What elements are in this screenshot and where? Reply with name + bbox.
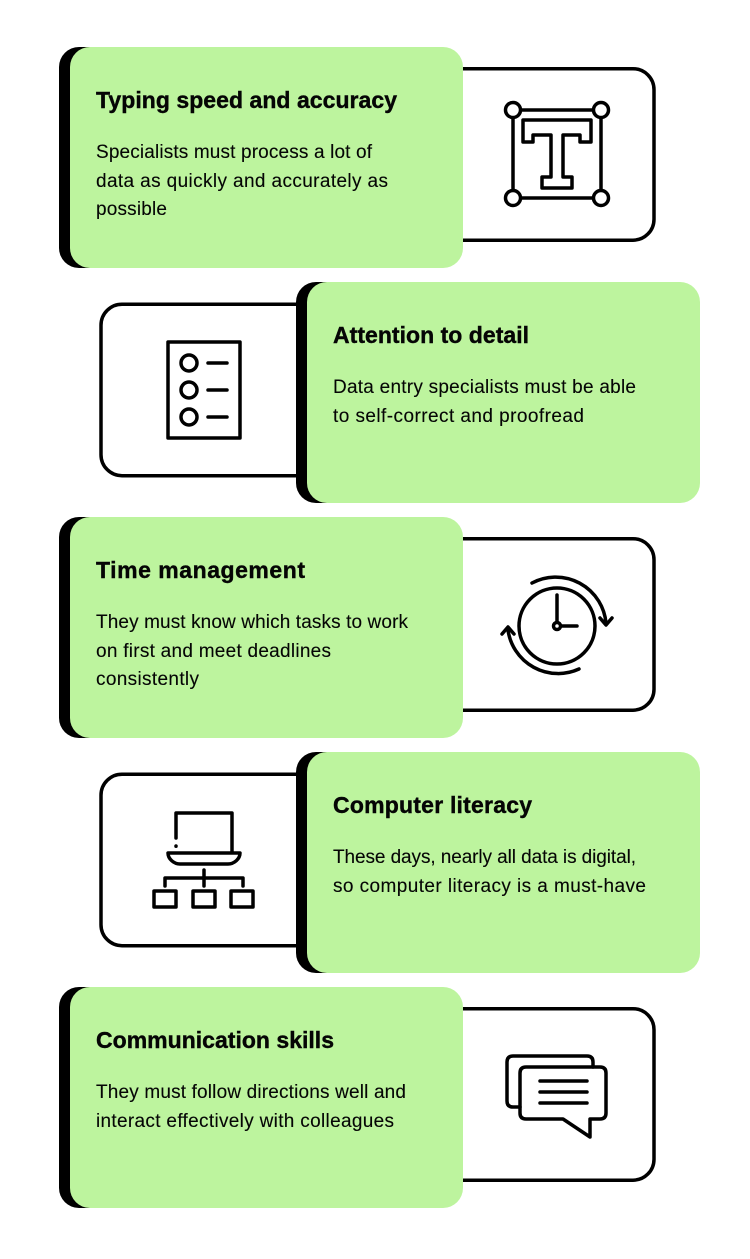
body text bbox=[96, 1082, 406, 1132]
icon box outline bbox=[420, 69, 654, 240]
icon: clock with arrows bbox=[502, 577, 612, 674]
heading: Time management bbox=[96, 557, 305, 583]
icon: laptop network bbox=[154, 813, 253, 907]
card black edge bbox=[59, 987, 179, 1208]
icon: speech bubbles bbox=[507, 1056, 606, 1137]
icon: checklist bbox=[168, 342, 240, 438]
panel: computer literacy bbox=[101, 752, 700, 973]
icon box outline bbox=[420, 1009, 654, 1180]
card green bbox=[70, 987, 463, 1208]
icon box outline bbox=[420, 539, 654, 710]
body text: They must follow directions well and bbox=[96, 1082, 406, 1103]
panel: time management bbox=[59, 517, 654, 738]
heading: Communication skills bbox=[96, 1027, 334, 1053]
panel: typing speed and accuracy bbox=[59, 47, 654, 268]
body text bbox=[96, 612, 408, 690]
card green bbox=[70, 517, 463, 738]
heading: Typing speed and accuracy bbox=[96, 87, 397, 113]
body text: to self-correct and proofread bbox=[333, 406, 584, 427]
body text bbox=[333, 377, 636, 427]
body text: Specialists must process a lot of bbox=[96, 142, 373, 163]
icon box outline bbox=[101, 774, 335, 946]
card green bbox=[70, 47, 463, 268]
body text: consistently bbox=[96, 669, 200, 690]
body text: data as quickly and accurately as bbox=[96, 171, 388, 192]
card black edge bbox=[59, 47, 179, 268]
body text: They must know which tasks to work bbox=[96, 612, 408, 633]
body text bbox=[96, 142, 388, 220]
body text bbox=[333, 847, 646, 897]
panel: attention to detail bbox=[101, 282, 700, 503]
body text: interact effectively with colleagues bbox=[96, 1111, 394, 1132]
card black edge bbox=[296, 752, 416, 973]
heading: Attention to detail bbox=[333, 322, 529, 348]
body text: on first and meet deadlines bbox=[96, 641, 331, 662]
panel: communication skills bbox=[59, 987, 654, 1208]
body text: These days, nearly all data is digital, bbox=[333, 847, 636, 868]
card green bbox=[307, 752, 700, 973]
body text: so computer literacy is a must-have bbox=[333, 876, 646, 897]
body text: Data entry specialists must be able bbox=[333, 377, 636, 398]
card green bbox=[307, 282, 700, 503]
body text: possible bbox=[96, 199, 167, 220]
icon: letter T in selection frame bbox=[506, 102, 608, 206]
card black edge bbox=[59, 517, 179, 738]
heading: Computer literacy bbox=[333, 792, 532, 818]
card black edge bbox=[296, 282, 416, 503]
icon box outline bbox=[101, 304, 335, 476]
